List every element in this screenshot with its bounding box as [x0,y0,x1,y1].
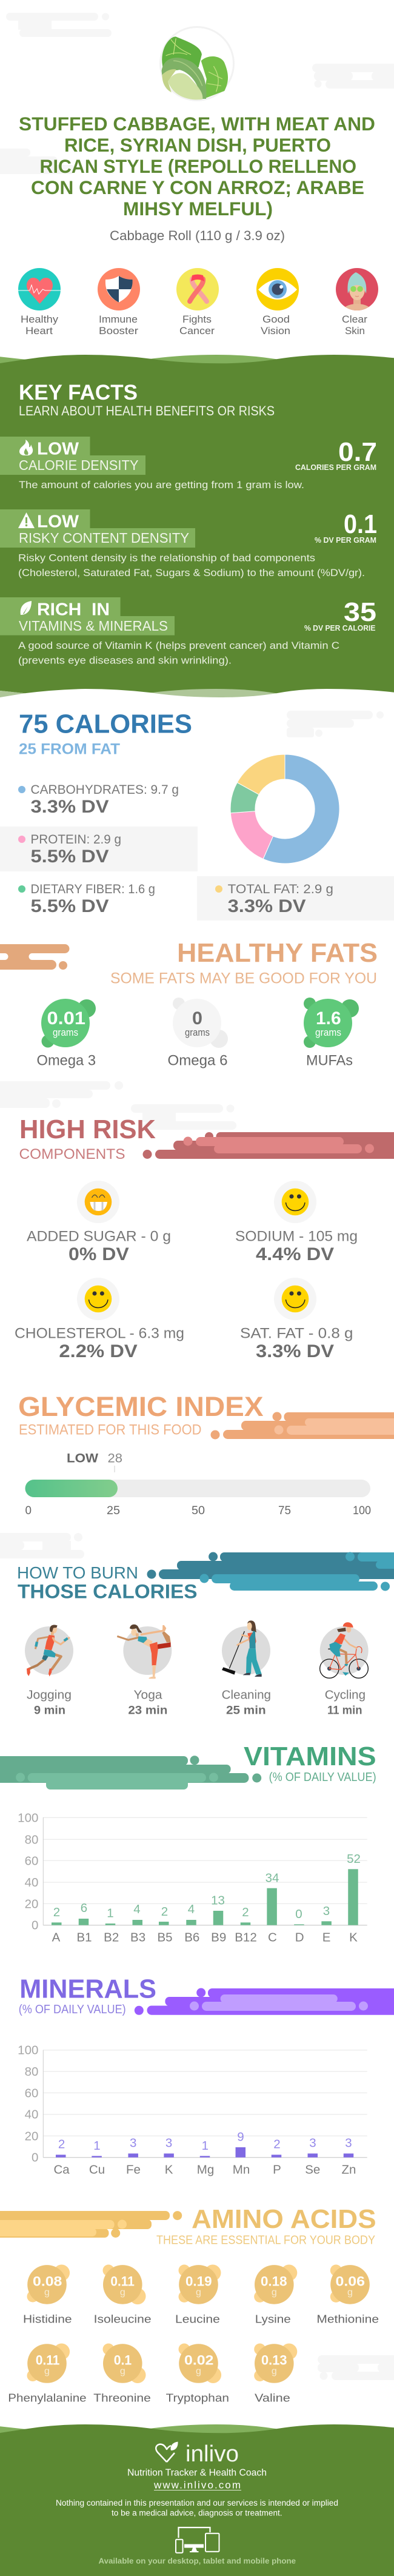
fact: rich in vitamins and minerals [0,597,376,666]
bar chart: vitamins: 4 [188,1902,195,1916]
stat: omega 6: Omega 6 [167,1053,228,1069]
legend: protein [18,832,121,867]
bar chart: minerals: 2 [273,2138,281,2152]
subheading: (% OF DAILY VALUE) [269,1771,376,1784]
fact: rich in vitamins and minerals: RICH IN [37,600,110,620]
stat: omega 3: Omega 3 [36,1053,96,1069]
stat: MUFAs: grams [315,1027,341,1038]
panel: health benefit icons [18,268,378,337]
bar chart: vitamins: K [349,1931,358,1945]
bar chart: minerals: Cu [89,2162,105,2176]
legend: dietary fiber: 5.5% DV [30,896,109,916]
legend: total fat: TOTAL FAT: 2.9 g [228,882,333,896]
fact: calorie density [0,437,377,491]
bar chart: vitamins: 13 [211,1894,225,1908]
bar chart: minerals: 40 [25,2108,38,2122]
bar chart: minerals: 9 [237,2130,244,2144]
icon: immune booster: Immune [99,314,138,325]
amino: threonine: 0.1 [114,2353,132,2367]
subheading: from fat: 25 FROM FAT [19,741,120,758]
bar chart: minerals: 1 [93,2139,101,2153]
icon: immune booster [98,268,140,337]
icon: clear skin: Clear [342,314,368,325]
bar chart: vitamins: 100 [18,1811,38,1825]
fact: rich in vitamins and minerals: VITAMINS & MINERALS [19,618,168,634]
heading: healthy fats: HEALTHY FATS [177,939,378,968]
title: RICAN STYLE (REPOLLO RELLENO [40,155,356,177]
activity: jogging [25,1625,73,1717]
amino: lysine: g [272,2287,277,2298]
bar chart: minerals: Mg [197,2162,214,2176]
legend row backgrounds [0,827,394,921]
bar chart: minerals: Mn [233,2162,250,2176]
stat: omega 3: grams [53,1027,78,1038]
bar chart: vitamins: B3 [130,1931,145,1945]
item: cholesterol: 2.2% DV [59,1341,138,1361]
fact: risky content density [0,509,377,579]
bar chart: vitamins: B12 [235,1931,257,1945]
fact: rich in vitamins and minerals: % DV PER CALORIE [304,623,376,632]
legend: carbohydrates: CARBOHYDRATES: 9.7 g [30,782,179,797]
stat: MUFAs [304,998,359,1069]
bar chart: vitamins: E [322,1931,330,1945]
bar chart: minerals: Fe [126,2162,141,2176]
item: saturated fat: 3.3% DV [256,1341,334,1361]
activity: cycling [320,1622,369,1717]
bar chart: minerals: 0 [32,2151,38,2165]
amino: leucine: 0.19 [185,2273,212,2289]
bar chart: minerals: Se [305,2162,320,2176]
fact: calorie density: 0.7 [338,438,377,467]
gauge: glycemic value: 28 [108,1452,122,1466]
subheading: LEARN ABOUT HEALTH BENEFITS OR RISKS [19,403,275,418]
legend: dietary fiber: DIETARY FIBER: 1.6 g [30,882,155,896]
disclaimer: Nothing contained in this presentation and our services is intended or implied [56,2498,338,2507]
amino: histidine: g [44,2287,50,2298]
heading: how to burn: HOW TO BURN [17,1563,138,1582]
bar chart: vitamins: C [268,1931,277,1945]
activity: yoga [117,1625,172,1717]
heading: vitamins: VITAMINS [244,1742,376,1771]
item: added sugar: 0% DV [68,1244,129,1264]
amino: threonine: g [120,2366,125,2376]
bar chart: vitamins: 3 [323,1904,330,1918]
panel: key facts [0,355,394,697]
heading: glycemic index: GLYCEMIC INDEX [18,1391,264,1422]
bar chart: minerals [18,2044,367,2176]
amino: valine: 0.13 [261,2353,287,2367]
icon: fights cancer [176,268,219,337]
activity: cycling: 11 min [327,1704,362,1717]
item: added sugar [27,1181,171,1264]
panel: header [19,27,375,243]
gauge: glycemic value: 50 [192,1504,205,1517]
amino: valine: Valine [255,2392,290,2404]
heading: 75 calories: 75 CALORIES [19,710,192,739]
amino: phenylalanine: g [44,2366,50,2376]
legend: dietary fiber [18,882,155,916]
bar chart: minerals: Ca [53,2162,70,2176]
bar chart: vitamins: 40 [25,1876,38,1890]
amino: lysine: 0.18 [261,2273,287,2289]
title: STUFFED CABBAGE, WITH MEAT AND [19,113,375,135]
amino: valine [254,2343,297,2404]
panel: amino acids [0,2205,379,2404]
green background with waves [0,355,394,697]
activity: jogging: 9 min [34,1704,65,1717]
icon: warning triangle [18,512,35,528]
amino: phenylalanine: 0.11 [36,2353,59,2367]
amino: valine: g [272,2366,277,2376]
activity: cleaning: 25 min [226,1704,266,1717]
amino: isoleucine: 0.11 [110,2273,135,2289]
heading: those calories: THOSE CALORIES [18,1581,198,1603]
fact: calorie density: LOW [37,439,79,458]
item: saturated fat: SAT. FAT - 0.8 g [240,1326,353,1342]
item: saturated fat [240,1278,353,1361]
bar chart: vitamins: B6 [184,1931,199,1945]
title [19,113,375,220]
icon: leaf [21,601,32,615]
heading: minerals: MINERALS [19,1974,156,2004]
stat: omega 3: 0.01 [47,1008,85,1028]
gauge: glycemic value [25,1452,371,1517]
food photo: cabbage [160,27,234,101]
stat: omega 6: grams [185,1027,210,1038]
bar chart: vitamins: 60 [25,1854,38,1868]
item: added sugar: ADDED SUGAR - 0 g [27,1229,171,1245]
gauge: glycemic value: 75 [278,1504,291,1517]
availability note: Available on your desktop, tablet and mobile phone [98,2557,296,2565]
amino: isoleucine: Isoleucine [94,2313,152,2325]
bar chart: vitamins: 0 [295,1907,302,1921]
bar chart: minerals: 2 [58,2138,65,2152]
amino: isoleucine [94,2264,152,2325]
icon: devices [176,2527,219,2553]
gauge: glycemic value: 100 [353,1504,371,1517]
activity: yoga: Yoga [133,1688,162,1702]
bar chart: vitamins: B2 [104,1931,119,1945]
fact: calorie density: CALORIE DENSITY [19,457,138,473]
amino: methionine: Methionine [316,2313,379,2325]
amino: methionine: g [347,2287,353,2298]
amino: histidine: 0.08 [33,2273,62,2289]
amino: threonine [93,2343,151,2404]
icon: healthy heart: Heart [25,326,53,337]
legend: carbohydrates: 3.3% DV [30,797,109,817]
bar chart: vitamins: B5 [157,1931,173,1945]
green background with wave [0,2424,394,2576]
bar chart: minerals: 100 [18,2044,38,2058]
stat: MUFAs: MUFAs [306,1053,353,1069]
bar chart: vitamins: 0 [32,1919,38,1933]
amino: phenylalanine: Phenylalanine [8,2392,87,2404]
subheading: (% OF DAILY VALUE) [19,2003,126,2016]
bar chart: vitamins: 4 [133,1902,141,1916]
fact: risky content density: RISKY CONTENT DENSITY [19,530,189,546]
legend: protein: 5.5% DV [30,847,109,867]
panel: calories [0,710,394,921]
amino: leucine: Leucine [175,2313,220,2325]
fact: calorie density: The amount of calories you are getting from 1 gram is low. [19,479,304,491]
bar chart: vitamins: B9 [211,1931,226,1945]
amino: methionine: 0.06 [336,2273,365,2289]
bar chart: vitamins: D [295,1931,304,1945]
amino: lysine: Lysine [255,2313,291,2325]
amino: histidine: Histidine [23,2313,72,2325]
bar chart: vitamins: 1 [107,1907,114,1920]
activity: cleaning: Cleaning [222,1688,271,1702]
fact: risky content density: LOW [37,512,79,531]
bar chart: minerals: 60 [25,2086,38,2100]
gauge: glycemic value: LOW [67,1452,98,1466]
disclaimer [56,2498,338,2518]
panel: healthy fats [0,939,378,1069]
activity: cycling: Cycling [325,1688,366,1702]
legend: carbohydrates [18,782,179,817]
icon: good vision: Vision [261,326,290,337]
panel: vitamins [0,1742,376,1945]
bar chart: minerals: P [273,2162,281,2176]
heading: high risk: HIGH RISK [19,1115,156,1144]
panel: minerals [18,1974,394,2176]
item: sodium: 4.4% DV [256,1244,334,1264]
website link: www.inlivo.com [153,2479,241,2490]
tagline: Nutrition Tracker & Health Coach [127,2468,267,2478]
amino: tryptophan: g [196,2366,201,2376]
item: sodium: SODIUM - 105 mg [235,1229,358,1245]
amino: methionine [316,2264,379,2325]
panel: how to burn those calories [17,1552,394,1717]
logo: inlivo: inlivo [185,2441,239,2467]
icon: healthy heart: Healthy [21,314,59,325]
amino: isoleucine: g [120,2287,125,2298]
panel: footer [0,2424,394,2576]
amino: histidine [23,2264,72,2325]
bar chart: minerals: 3 [345,2136,352,2150]
legend: protein: PROTEIN: 2.9 g [30,832,121,847]
bar chart: vitamins: 80 [25,1833,38,1846]
title: CON CARNE Y CON ARROZ; ARABE [31,176,364,198]
title: MIHSY MELFUL) [123,198,273,220]
stat: omega 3 [36,999,96,1069]
bar chart: minerals: K [165,2162,173,2176]
bar chart: minerals: 1 [202,2139,209,2153]
icon: good vision [256,268,299,337]
fact: risky content density: 0.1 [344,510,377,539]
amino: leucine [175,2264,221,2325]
title: RICE, SYRIAN DISH, PUERTO [64,134,331,156]
stat: omega 6: 0 [192,1008,202,1028]
serving size: Cabbage Roll (110 g / 3.9 oz) [110,228,285,243]
heading: amino acids: AMINO ACIDS [192,2205,376,2234]
donut chart [230,754,339,864]
fact: rich in vitamins and minerals: A good source of Vitamin K (helps prevent cancer) and Vitamin C [18,640,339,651]
activity: cleaning [222,1620,271,1717]
bar chart: vitamins: 34 [265,1871,279,1885]
item: cholesterol [15,1278,184,1361]
stat: MUFAs: 1.6 [316,1008,341,1028]
amino: leucine: g [196,2287,201,2298]
icon: flame [19,440,33,455]
bar chart: minerals: Zn [342,2162,356,2176]
logo: inlivo [156,2441,239,2467]
fact: risky content density: Risky Content density is the relationship of bad components [18,552,315,564]
bar chart: vitamins [18,1811,367,1945]
icon: immune booster: Booster [99,326,139,337]
bar chart: minerals: 3 [165,2136,172,2150]
fact: risky content density: (Cholesterol, Saturated Fat, Sugars & Sodium) to the amount (%DV/gr). [18,567,365,579]
fact: calorie density: CALORIES PER GRAM [295,463,376,472]
activity: jogging: Jogging [27,1688,72,1702]
bar chart: minerals: 3 [130,2136,136,2150]
amino: threonine: Threonine [93,2392,151,2404]
bar chart: vitamins: 2 [53,1905,60,1919]
bar chart: vitamins: 20 [25,1897,38,1911]
bar chart: minerals: 80 [25,2065,38,2079]
panel: glycemic index [18,1391,394,1517]
disclaimer: to be a medical advice, diagnosis or treatment. [112,2509,282,2518]
legend: total fat: 3.3% DV [228,896,306,916]
subheading: SOME FATS MAY BE GOOD FOR YOU [110,970,377,987]
activity: yoga: 23 min [128,1704,167,1717]
bar chart: vitamins: 2 [161,1905,168,1919]
amino: phenylalanine [8,2343,87,2404]
legend: total fat [215,882,333,916]
amino: tryptophan: Tryptophan [166,2392,229,2404]
bar chart: vitamins: A [52,1931,61,1945]
item: cholesterol: CHOLESTEROL - 6.3 mg [15,1326,184,1342]
gauge: glycemic value: 0 [25,1504,32,1517]
fact: risky content density: % DV PER GRAM [315,535,376,545]
item: sodium [235,1181,358,1264]
amino: lysine [254,2264,297,2325]
heading: key facts: KEY FACTS [19,381,138,404]
amino: tryptophan [166,2343,229,2404]
panel: high risk components [15,1115,394,1361]
bar chart: minerals: 20 [25,2129,38,2143]
bar chart: vitamins: 2 [242,1905,249,1919]
fact: rich in vitamins and minerals: 35 [344,598,376,627]
bar chart: vitamins: B1 [76,1931,92,1945]
icon: fights cancer: Fights [182,314,212,325]
amino: tryptophan: 0.02 [184,2353,213,2367]
subheading: ESTIMATED FOR THIS FOOD [19,1422,201,1438]
bar chart: vitamins: 6 [81,1901,87,1915]
icon: fights cancer: Cancer [179,326,215,337]
icon: healthy heart [18,268,61,337]
bar chart: minerals: 3 [309,2136,316,2150]
subheading: components: COMPONENTS [19,1146,125,1162]
icon: clear skin: Skin [345,326,365,337]
icon: good vision: Good [262,314,290,325]
stat: omega 6 [167,998,228,1069]
bar chart: vitamins: 52 [347,1852,361,1866]
gauge: glycemic value: 25 [107,1504,120,1517]
fact: rich in vitamins and minerals: (prevents eye diseases and skin wrinkling). [18,655,232,666]
icon: clear skin [336,268,378,337]
